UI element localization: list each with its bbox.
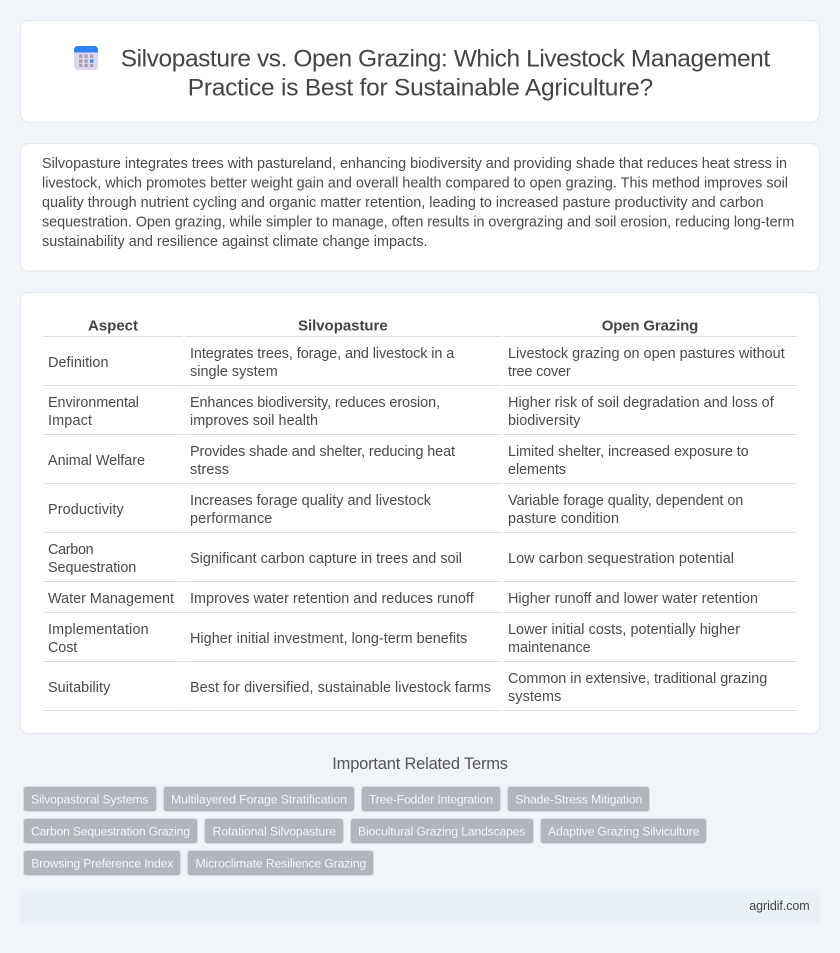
tag (24, 850, 180, 876)
row: definition (48, 346, 785, 380)
tag (204, 818, 344, 844)
row: productivity: Productivity (48, 502, 124, 518)
row: environmental impact: Higher risk of soil degradation and loss of (508, 395, 775, 411)
row: implementation cost: Lower initial costs, potentially higher (508, 622, 740, 638)
row: animal welfare: elements (508, 462, 566, 478)
tag (164, 786, 354, 812)
tag (24, 786, 156, 812)
row: animal welfare: Provides shade and shelter, reducing heat (190, 444, 455, 460)
row: implementation cost (48, 622, 740, 656)
row: environmental impact (48, 395, 775, 429)
tag: Carbon Sequestration Grazing (31, 824, 190, 838)
row: carbon sequestration (48, 542, 734, 576)
tag: Browsing Preference Index (31, 856, 173, 870)
tag: Tree-Fodder Integration (369, 792, 493, 806)
row: environmental impact: Environmental (48, 395, 139, 411)
title: Silvopasture vs. Open Grazing: Which Livestock Management (121, 46, 770, 72)
row: implementation cost: maintenance (508, 640, 591, 656)
panel: intro text: sequestration. Open grazing, while simpler to manage, often results in overgrazing and soil erosion, reducing long-term (42, 214, 794, 230)
tag: Biocultural Grazing Landscapes (358, 824, 526, 838)
row: suitability: systems (508, 689, 561, 705)
row: environmental impact: Enhances biodiversity, reduces erosion, (190, 395, 440, 411)
panel: intro text: quality through nutrient cycling and organic matter retention, leading to increased pasture productivity and carbon (42, 195, 764, 211)
footer: agridif.com (749, 899, 810, 913)
row: animal welfare: Limited shelter, increased exposure to (508, 444, 749, 460)
row: productivity (48, 493, 743, 527)
row: productivity: pasture condition (508, 511, 619, 527)
row: implementation cost: Implementation (48, 622, 149, 638)
row: carbon sequestration: Sequestration (48, 560, 136, 576)
row: carbon sequestration: Carbon (48, 542, 94, 558)
row: animal welfare: Animal Welfare (48, 453, 145, 469)
row: definition: Integrates trees, forage, and livestock in a (190, 346, 454, 362)
row: definition: Livestock grazing on open pastures without (508, 346, 785, 362)
row: water management: Improves water retention and reduces runoff (190, 591, 475, 607)
panel: intro text: livestock, which promotes better weight gain and overall health compared to open grazing. This method improves soil (42, 176, 788, 192)
row: suitability: Common in extensive, traditional grazing (508, 671, 767, 687)
tag (540, 818, 706, 844)
tag (350, 818, 534, 844)
panel: comparison table (20, 292, 820, 734)
tag: Adaptive Grazing Silviculture (548, 824, 700, 838)
row: environmental impact: improves soil health (190, 413, 318, 429)
row: suitability: Best for diversified, sustainable livestock farms (190, 680, 491, 696)
table header: Open Grazing (602, 318, 698, 334)
row: carbon sequestration: Significant carbon capture in trees and soil (190, 551, 462, 567)
tag (362, 786, 500, 812)
tag: Microclimate Resilience Grazing (196, 856, 366, 870)
row: implementation cost: Higher initial investment, long-term benefits (190, 631, 467, 647)
related term tags (24, 786, 706, 876)
row: productivity: Variable forage quality, dependent on (508, 493, 743, 509)
title (121, 46, 770, 102)
row: suitability: Suitability (48, 680, 111, 696)
tag (508, 786, 650, 812)
panel: intro text: Silvopasture integrates trees with pastureland, enhancing biodiversity and providing shade that reduces heat stress in (42, 156, 787, 172)
row: definition: single system (190, 364, 278, 380)
row: implementation cost: Cost (48, 640, 77, 656)
table header: Aspect (88, 318, 138, 334)
row: water management (48, 591, 758, 607)
panel: title card (20, 20, 820, 122)
tag: Silvopastoral Systems (31, 792, 148, 806)
row: productivity: Increases forage quality and livestock (190, 493, 432, 509)
row: water management: Water Management (48, 591, 174, 607)
row: environmental impact: Impact (48, 413, 92, 429)
row: carbon sequestration: Low carbon sequestration potential (508, 551, 734, 567)
footer (20, 889, 820, 923)
row: suitability (48, 671, 767, 705)
row: definition: tree cover (508, 364, 571, 380)
icon: calendar (74, 46, 98, 70)
row: animal welfare: stress (190, 462, 229, 478)
panel: intro text: sustainability and resilience against climate change impacts. (42, 234, 428, 250)
row: productivity: performance (190, 511, 272, 527)
row: animal welfare (48, 444, 749, 478)
tag: Shade-Stress Mitigation (515, 792, 642, 806)
table header: Silvopasture (298, 318, 388, 334)
tag: Rotational Silvopasture (213, 824, 336, 838)
tag (188, 850, 374, 876)
table header (88, 318, 698, 334)
title: Practice is Best for Sustainable Agriculture? (188, 74, 653, 102)
heading: important related terms: Important Related Terms (332, 755, 508, 773)
row: water management: Higher runoff and lower water retention (508, 591, 758, 607)
tag: Multilayered Forage Stratification (171, 792, 347, 806)
row: environmental impact: biodiversity (508, 413, 581, 429)
tag (24, 818, 198, 844)
panel: intro text (20, 144, 820, 271)
row: definition: Definition (48, 355, 108, 371)
